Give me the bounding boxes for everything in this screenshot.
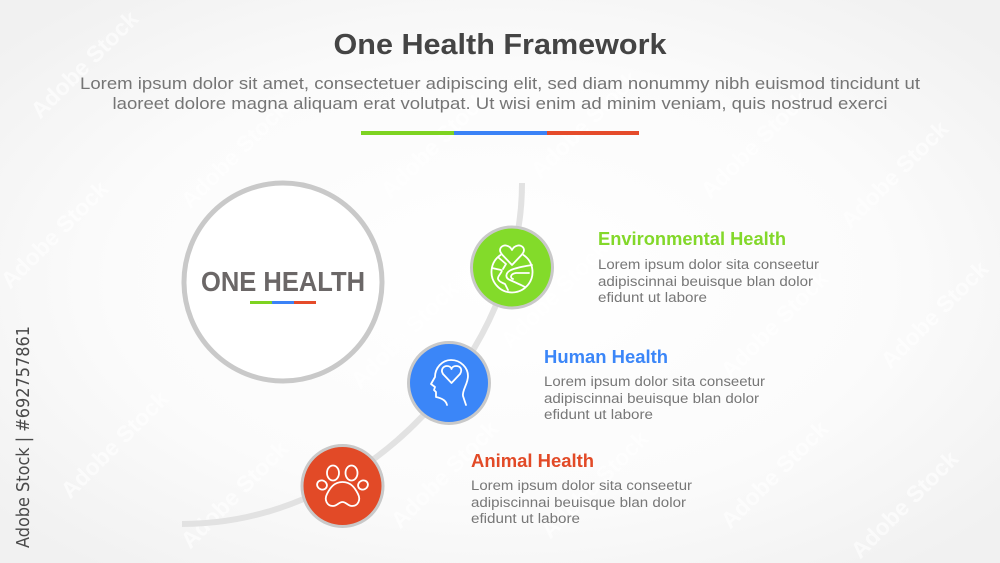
intro text block: laoreet dolore magna aliquam erat volutpat. Ut wisi enim ad minim veniam, quis nostrud exerci [112,94,888,113]
text: Adobe Stock [715,265,833,383]
environmental health text: efidunt ut labore [598,290,707,305]
central circle: one health: ONE HEALTH [201,266,365,297]
environmental health text: Environmental Health [598,229,786,249]
icon: paw print [316,466,369,506]
environmental health node [472,227,552,308]
text: Adobe Stock [205,245,323,363]
text: Adobe Stock [835,115,953,233]
text: Adobe Stock [715,415,833,533]
environmental health text [598,229,820,305]
central circle: one health [184,183,382,381]
text: Adobe Stock [385,415,503,533]
animal health text: efidunt ut labore [471,511,580,526]
tricolour title divider [361,131,639,135]
animal health text: Animal Health [471,451,594,471]
animal health node [302,446,383,526]
human health text: adipiscinnai beuisque blan dolor [544,391,760,406]
text: Adobe Stock [175,435,293,553]
stock image credit: Adobe Stock | #692757861 [14,326,34,548]
human health text [544,347,766,422]
animal health text: Lorem ipsum dolor sita conseetur [471,478,693,493]
human health text: Human Health [544,347,668,367]
animal health text: adipiscinnai beuisque blan dolor [471,495,687,510]
text: Adobe Stock [535,425,653,543]
text: Adobe Stock [525,65,643,183]
text: Adobe Stock [345,275,463,393]
text: Adobe Stock [375,85,493,203]
animal health text [471,451,693,526]
text: Adobe Stock [55,385,173,503]
text: Adobe Stock [695,85,813,203]
curved connector line [182,183,522,524]
text: Adobe Stock [875,255,993,373]
human health node [408,342,490,424]
environmental health text: adipiscinnai beuisque blan dolor [598,274,814,289]
icon: earth with heart [491,245,532,292]
text: Adobe Stock [845,445,963,563]
human health text: efidunt ut labore [544,407,653,422]
icon: head with heart [431,360,468,405]
title: One Health Framework [334,29,667,61]
text: Adobe Stock [495,235,613,353]
text: Adobe Stock [175,95,293,213]
intro text block [80,74,920,113]
text: Adobe Stock [25,5,143,123]
human health text: Lorem ipsum dolor sita conseetur [544,374,766,389]
intro text block: Lorem ipsum dolor sit amet, consectetuer adipiscing elit, sed diam nonummy nibh euismod tincidunt ut [80,74,920,93]
environmental health text: Lorem ipsum dolor sita conseetur [598,257,820,272]
